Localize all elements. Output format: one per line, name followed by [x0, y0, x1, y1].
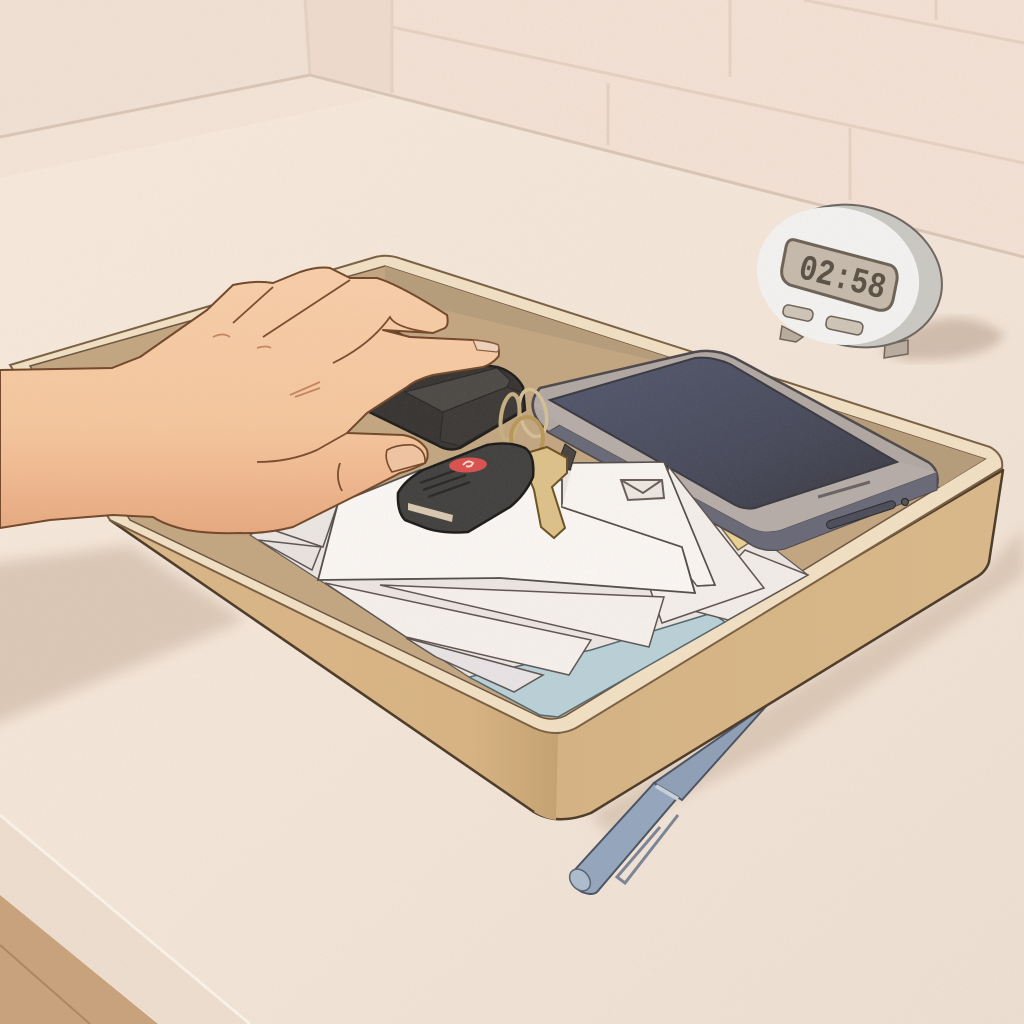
- phone: [533, 351, 938, 550]
- hand and arm: [0, 268, 499, 533]
- clock display: [782, 240, 897, 310]
- clock buttons: [782, 304, 814, 322]
- wall: [0, 0, 1024, 300]
- big envelope: [318, 470, 695, 593]
- tray: [10, 256, 1003, 820]
- black fob under hand: [345, 345, 525, 449]
- yellow note: [704, 505, 769, 550]
- car key fob: [398, 444, 533, 532]
- counter front edge: [0, 815, 250, 1024]
- fingernails: [473, 340, 499, 352]
- tray interior: [30, 266, 985, 719]
- sheet stack: [318, 462, 764, 675]
- wood floor: [0, 895, 158, 1024]
- clock body: [752, 186, 958, 366]
- blue envelope: [469, 613, 725, 717]
- left sheets: [258, 540, 321, 570]
- tray outer body: [110, 470, 1003, 819]
- tray rim: [10, 256, 1002, 733]
- key rings and key: [498, 387, 576, 538]
- pen: [565, 703, 769, 895]
- clock: [741, 186, 958, 366]
- shadows on counter: [0, 528, 1024, 835]
- back counter lip: [0, 75, 379, 178]
- under-sheet backing: [250, 460, 808, 717]
- back sheet right: [690, 550, 808, 620]
- finger creases: [233, 280, 433, 491]
- clock: 02:58: [795, 248, 890, 309]
- stamp icon: [621, 480, 664, 500]
- clock feet: [780, 326, 803, 342]
- lilac sheet: [406, 638, 543, 692]
